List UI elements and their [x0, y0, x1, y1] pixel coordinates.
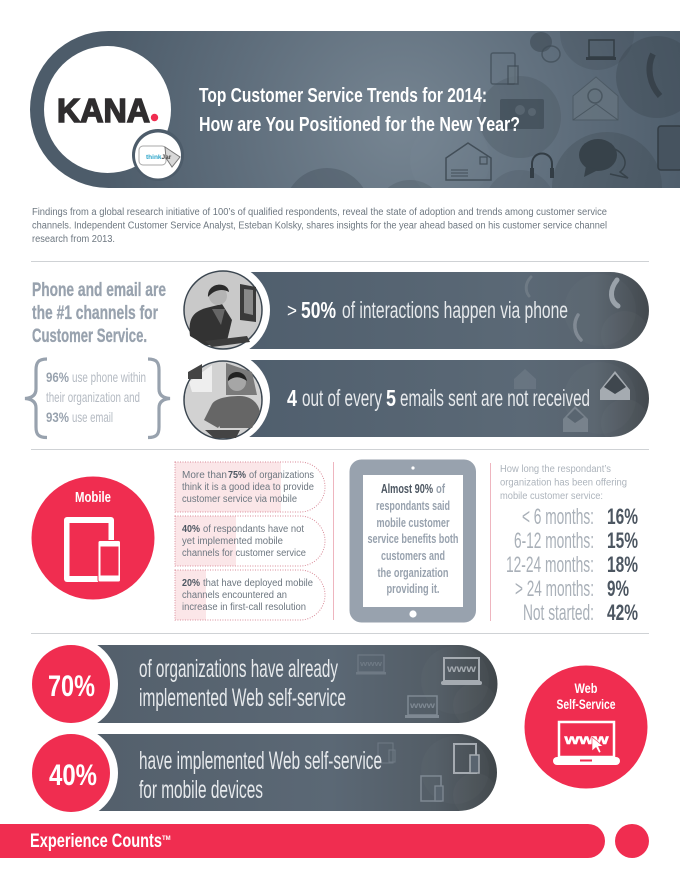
- stat text: [139, 655, 346, 712]
- stat text: have implemented Web self-service: [139, 747, 382, 775]
- stat text: [287, 297, 568, 323]
- callout: 75 percent: of organizations: [249, 470, 314, 481]
- thinkJar badge: [132, 129, 184, 181]
- mobile circle: [32, 476, 154, 600]
- duration statistics: > 24 months:: [515, 576, 594, 601]
- callout: 75 percent: [175, 462, 325, 512]
- stat text: of organizations have already: [139, 655, 338, 683]
- icon: tablets: [378, 743, 479, 801]
- callout: 40 percent: yet implemented mobile: [182, 536, 283, 547]
- photo: call-center agent: [184, 271, 262, 349]
- web self-service circle: Web: [574, 680, 598, 696]
- icon: laptops: [356, 655, 482, 718]
- survey duration intro: mobile customer service:: [500, 491, 603, 502]
- icon: envelopes: [514, 369, 630, 432]
- callout: 20 percent: 20%: [182, 578, 200, 589]
- tablet callout: [350, 460, 476, 622]
- header banner: [30, 31, 680, 188]
- stat text: 5: [386, 385, 396, 411]
- stat badge: 40 percent: [32, 734, 110, 812]
- stat text: 50%: [301, 297, 336, 323]
- callout: 40 percent: [175, 516, 325, 566]
- duration statistics: 6-12 months:: [514, 528, 594, 553]
- callout: 75 percent: 75%: [228, 470, 246, 481]
- tablet callout: providing it.: [386, 581, 440, 596]
- tablet callout: mobile customer: [376, 515, 450, 530]
- bracketed stat text: use email: [72, 409, 113, 425]
- intro text: [32, 207, 607, 245]
- stat badge: 40 percent: 40%: [49, 759, 97, 792]
- intro text: research from 2013.: [32, 234, 115, 245]
- bracketed stat text: 96%: [46, 369, 69, 385]
- duration statistics: 9%: [607, 576, 629, 601]
- footer bar: Experience Counts: [30, 831, 162, 852]
- callout: 75 percent: More than: [182, 470, 227, 481]
- footer bar: [0, 824, 605, 858]
- footer dot: [615, 824, 649, 858]
- survey duration intro: How long the respondant’s: [500, 464, 611, 475]
- callout: 40 percent: channels for customer service: [182, 548, 306, 559]
- tablet callout: of: [436, 481, 445, 496]
- stat badge: 70 percent: [32, 645, 110, 723]
- duration statistics: 12-24 months:: [506, 552, 594, 577]
- thinkJar badge: thinkJar: [146, 154, 172, 161]
- mobile circle: Mobile: [75, 489, 111, 506]
- email stat bar: [176, 351, 649, 447]
- 40 percent web bar: [24, 726, 497, 820]
- heading: phone and email: [32, 280, 166, 347]
- phone stat bar: [176, 263, 649, 359]
- heading: phone and email: the #1 channels for: [32, 303, 158, 324]
- survey duration intro: [500, 464, 627, 502]
- stat text: 4: [287, 385, 297, 411]
- icon: phones: [526, 277, 618, 340]
- tablet callout: customers and: [381, 548, 445, 563]
- icon: laptops: www: [409, 701, 436, 710]
- tablet callout: respondants said: [376, 498, 450, 513]
- icon: tablet and phone: [64, 517, 120, 582]
- duration statistics: Not started:: [523, 600, 594, 625]
- header background icons: [291, 31, 680, 188]
- photo: man with laptop: [184, 361, 262, 439]
- tablet callout: service benefits both: [368, 531, 459, 546]
- callout: 75 percent: think it is a good idea to provide: [182, 482, 314, 493]
- stat badge: 70 percent: 70%: [48, 670, 95, 703]
- footer bar: TM: [162, 836, 171, 842]
- web self-service circle: Self-Service: [556, 696, 616, 712]
- callout: 20 percent: increase in first-call resolution: [182, 602, 306, 613]
- bracketed stat text: their organization and: [46, 389, 140, 405]
- icon: laptop with www: www: [563, 731, 609, 747]
- stat text: of interactions happen via phone: [342, 297, 568, 323]
- callout: 40 percent: of respondants have not: [203, 524, 304, 535]
- title: [199, 85, 520, 136]
- callout: 20 percent: [175, 570, 325, 620]
- callout: 20 percent: channels encountered an: [182, 590, 287, 601]
- intro text: Findings from a global research initiative of 100’s of qualified respondents, reveal the state of adoption and trends among customer service: [32, 207, 607, 218]
- intro text: channels. Independent Customer Service Analyst, Esteban Kolsky, shares insights for the year ahead based on his customer service channel: [32, 220, 607, 232]
- tablet callout: the organization: [378, 565, 449, 580]
- heading: phone and email: Customer Service.: [32, 326, 147, 347]
- stat text: implemented Web self-service: [139, 684, 346, 712]
- duration statistics: [506, 504, 638, 625]
- duration statistics: 42%: [607, 600, 638, 625]
- title: Top Customer Service Trends for 2014:: [199, 85, 487, 107]
- web self-service circle: [524, 666, 648, 788]
- stat text: emails sent are not received: [400, 385, 590, 411]
- duration statistics: < 6 months:: [522, 504, 594, 529]
- logo circle: [44, 46, 171, 173]
- stat text: [139, 747, 382, 804]
- duration statistics: 16%: [607, 504, 638, 529]
- 70 percent web bar: [24, 637, 498, 731]
- stat text: >: [287, 301, 297, 322]
- bracketed stat text: use phone within: [72, 369, 146, 385]
- tablet callout: Almost 90%: [381, 481, 433, 496]
- bracketed stat text: 93%: [46, 409, 69, 425]
- icon: laptops: www: [446, 664, 476, 675]
- stat text: for mobile devices: [139, 776, 263, 804]
- survey duration intro: organization has been offering: [500, 478, 627, 488]
- callout: 20 percent: that have deployed mobile: [203, 578, 313, 589]
- stat text: out of every: [302, 385, 382, 411]
- callout: 40 percent: 40%: [182, 524, 200, 535]
- KANA logo: KANA: [57, 92, 150, 129]
- bracketed stat text: [25, 359, 170, 438]
- title: How are You Positioned for the New Year?: [199, 114, 520, 136]
- stat text: [287, 385, 590, 411]
- heading: phone and email: Phone and email are: [32, 280, 166, 301]
- icon: laptops: www: [359, 661, 383, 668]
- callout: 75 percent: customer service via mobile: [182, 494, 297, 505]
- duration statistics: 18%: [607, 552, 638, 577]
- duration statistics: 15%: [607, 528, 638, 553]
